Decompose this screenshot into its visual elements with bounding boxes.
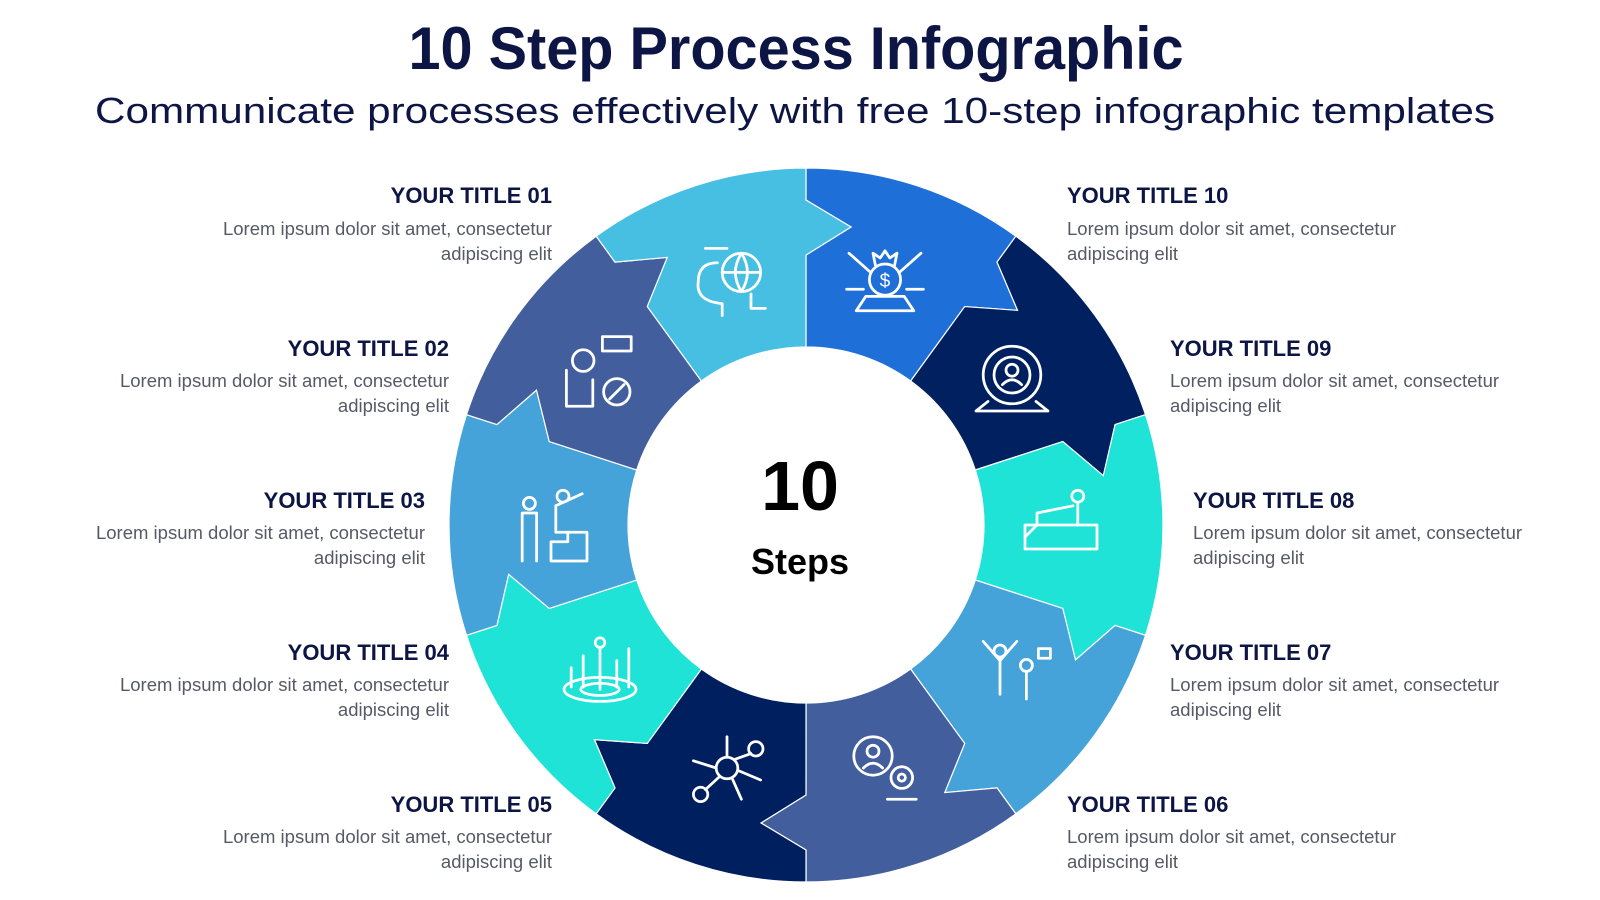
label 05 [223, 792, 552, 872]
segment 03 [401, 368, 669, 635]
label 06 [1067, 792, 1396, 872]
label 10: Lorem ipsum dolor sit amet, consectetur [1067, 218, 1396, 239]
ring chart [401, 112, 1211, 900]
label 10 [1067, 183, 1396, 264]
label 01 [223, 183, 552, 264]
icon: award badge (09) [976, 346, 1048, 411]
icon: mentor on podium (03) [522, 490, 587, 561]
label 02: Lorem ipsum dolor sit amet, consectetur [120, 370, 449, 391]
label 06: Lorem ipsum dolor sit amet, consectetur [1067, 826, 1396, 847]
label 04 [120, 640, 450, 720]
label 05: adipiscing elit [441, 851, 552, 872]
label 07: adipiscing elit [1170, 699, 1281, 720]
label 08 [1193, 488, 1522, 568]
icon: money bag (10) [847, 251, 923, 311]
label 01: Lorem ipsum dolor sit amet, consectetur [223, 218, 552, 239]
label 04: Lorem ipsum dolor sit amet, consectetur [120, 674, 449, 695]
icon: target bars (04) [564, 638, 636, 701]
icon: money bag (10): $ [880, 271, 891, 292]
label 01: YOUR TITLE 01 [391, 183, 552, 208]
label 09: YOUR TITLE 09 [1170, 336, 1331, 361]
label 10: YOUR TITLE 10 [1067, 183, 1228, 208]
label 07: YOUR TITLE 07 [1170, 640, 1331, 665]
label 09 [1170, 336, 1499, 416]
segment 06 [719, 641, 1016, 900]
segment 08 [943, 415, 1211, 682]
center label [751, 447, 849, 582]
label 09: Lorem ipsum dolor sit amet, consectetur [1170, 370, 1499, 391]
segment 10 [806, 168, 1018, 381]
label 08: adipiscing elit [1193, 547, 1304, 568]
label 02: YOUR TITLE 02 [288, 336, 449, 361]
segment 07 [878, 569, 1146, 837]
title: 10 Step Process Infographic [408, 15, 1184, 82]
label 03 [96, 488, 425, 568]
icon: head globe (01) [698, 248, 765, 316]
segment 05 [594, 669, 806, 882]
label 07: Lorem ipsum dolor sit amet, consectetur [1170, 674, 1499, 695]
segment 01 [596, 112, 893, 409]
label 03: YOUR TITLE 03 [264, 488, 425, 513]
label 02 [120, 336, 449, 416]
label 01: adipiscing elit [441, 243, 552, 264]
center label: Steps [751, 541, 849, 582]
subtitle: Communicate processes effectively with free 10-step infographic templates [95, 90, 1495, 131]
segment 04 [425, 517, 721, 814]
label 08: Lorem ipsum dolor sit amet, consectetur [1193, 522, 1522, 543]
label 05: Lorem ipsum dolor sit amet, consectetur [223, 826, 552, 847]
label 07 [1170, 640, 1499, 720]
label 06: adipiscing elit [1067, 851, 1178, 872]
center label: 10 [761, 447, 839, 525]
label 04: YOUR TITLE 04 [288, 640, 450, 665]
label 03: adipiscing elit [314, 547, 425, 568]
segment 09 [891, 236, 1187, 533]
label 10: adipiscing elit [1067, 243, 1178, 264]
label 03: Lorem ipsum dolor sit amet, consectetur [96, 522, 425, 543]
icon: team celebrate (07) [983, 641, 1050, 699]
label 02: adipiscing elit [338, 395, 449, 416]
segment 02 [466, 213, 734, 481]
label 09: adipiscing elit [1170, 395, 1281, 416]
icon: person and gear (06) [854, 737, 916, 799]
icon: hand money percent (02) [566, 337, 631, 406]
icon: network (05) [693, 737, 763, 802]
label 04: adipiscing elit [338, 699, 449, 720]
label 06: YOUR TITLE 06 [1067, 792, 1228, 817]
label 05: YOUR TITLE 05 [391, 792, 552, 817]
icon: people on steps (08) [1025, 490, 1097, 549]
label 08: YOUR TITLE 08 [1193, 488, 1354, 513]
